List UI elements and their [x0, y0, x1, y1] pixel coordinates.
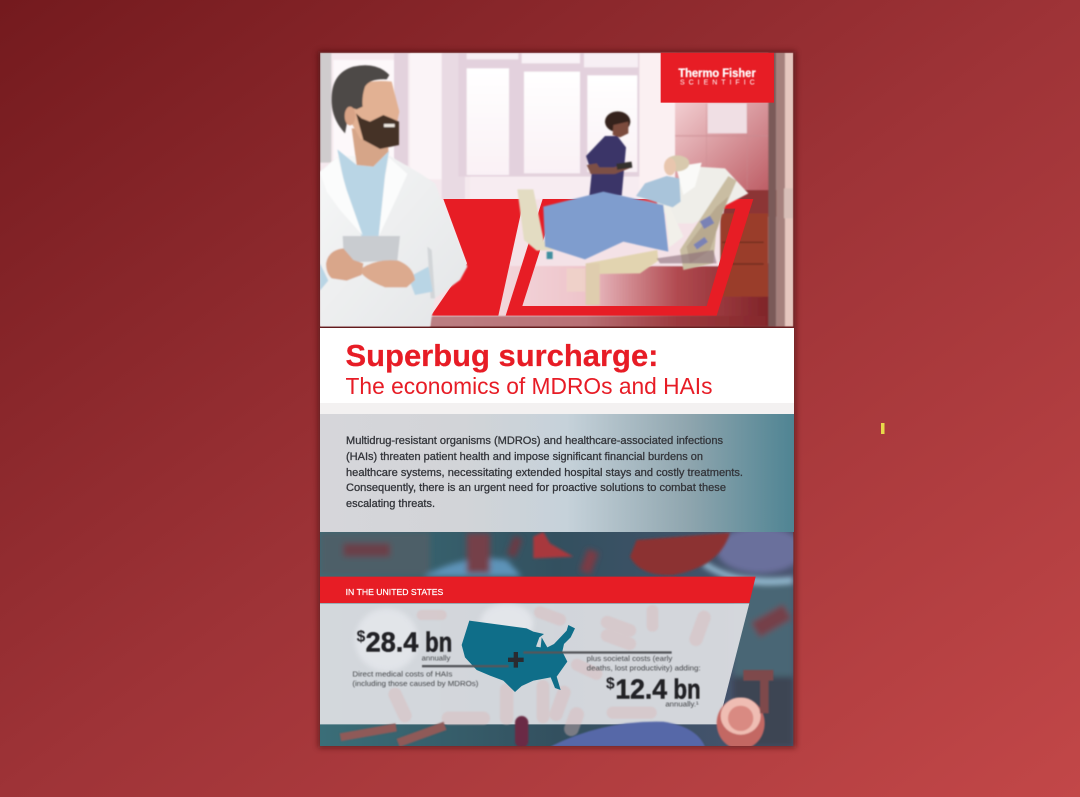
intro text: Consequently, there is an urgent need for proactive solutions to combat these	[346, 482, 726, 494]
stat: direct medical costs: (including those caused by MDROs)	[352, 679, 479, 688]
stat: societal costs: 12.4	[615, 674, 667, 705]
intro text: healthcare systems, necessitating extended hospital stays and costly treatments.	[346, 467, 743, 479]
logo: Thermo Fisher Scientific: SCIENTIFIC	[680, 80, 755, 87]
red banner	[320, 577, 756, 603]
stat: societal costs: $	[606, 676, 615, 693]
stat: direct medical costs: bn	[425, 626, 452, 657]
stat: societal costs: deaths, lost productivity) adding:	[587, 664, 701, 673]
stat: societal costs: plus societal costs (early	[587, 654, 672, 663]
light panel	[320, 603, 749, 738]
panel: United States costs	[320, 527, 803, 749]
stat: societal costs: bn	[673, 674, 701, 705]
doctor	[320, 65, 467, 327]
logo: Thermo Fisher Scientific: Thermo Fisher	[678, 66, 756, 80]
stat: societal costs: annually.¹	[665, 700, 699, 709]
panel: hero photo	[320, 53, 793, 327]
panel: introduction	[320, 414, 794, 532]
intro text: Multidrug-resistant organisms (MDROs) and healthcare-associated infections	[346, 435, 723, 447]
stat: direct medical costs: 28.4	[366, 626, 419, 657]
logo: Thermo Fisher Scientific	[661, 53, 774, 103]
foreground bacteria	[340, 670, 773, 749]
heading: Superbug surcharge:	[346, 339, 658, 373]
page shadow	[318, 51, 796, 748]
red graphic: outlined parallelogram	[506, 199, 753, 316]
stat: societal costs	[523, 651, 701, 709]
yellow marker	[881, 423, 884, 434]
stat: direct medical costs	[352, 626, 509, 688]
stat: direct medical costs: Direct medical costs of HAIs	[352, 670, 453, 679]
hospital bed and patient	[517, 155, 748, 305]
banner label: IN THE UNITED STATES	[346, 587, 444, 597]
plus sign	[508, 652, 524, 668]
stat: direct medical costs: annually	[422, 653, 451, 662]
bacteria background	[320, 527, 803, 747]
intro text	[346, 435, 743, 510]
map of the United States	[462, 621, 575, 692]
stat: direct medical costs: $	[357, 628, 366, 645]
nurse	[586, 111, 632, 196]
intro text: (HAIs) threaten patient health and impose significant financial burdens on	[346, 451, 703, 463]
panel: title	[320, 328, 794, 414]
faint bacteria in panel	[386, 605, 713, 738]
intro text: escalating threats.	[346, 498, 435, 510]
subheading: The economics of MDROs and HAIs	[346, 373, 712, 399]
hospital room	[320, 53, 793, 327]
red graphic: solid chevron	[431, 199, 524, 316]
